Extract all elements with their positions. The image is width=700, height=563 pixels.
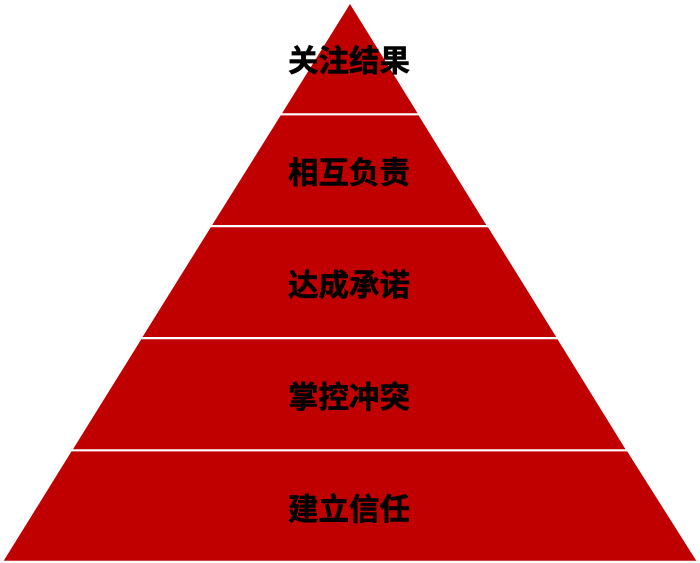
tier 5: build trust: 建立信任 [288, 493, 410, 527]
tier 1: focus on results: 关注结果 [288, 44, 410, 78]
tier 4: master conflict: 掌控冲突 [288, 381, 410, 415]
tier 5: build trust [4, 451, 696, 561]
tier 3: reach commitment [142, 227, 556, 337]
tier 2: mutual accountability [212, 115, 486, 225]
tier 2: mutual accountability: 相互负责 [288, 156, 410, 190]
tier 1: focus on results [282, 4, 418, 113]
tier 4: master conflict [73, 339, 626, 449]
tier 3: reach commitment: 达成承诺 [288, 269, 410, 303]
